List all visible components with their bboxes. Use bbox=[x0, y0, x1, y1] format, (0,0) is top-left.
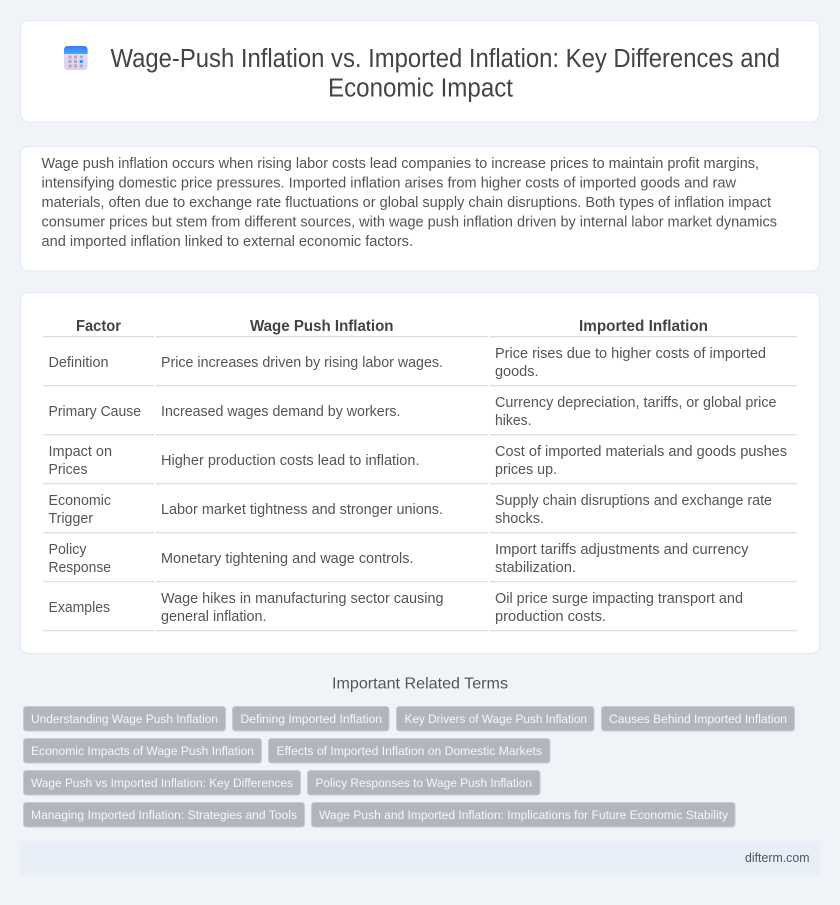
tag: Economic Impacts of Wage Push Inflation bbox=[31, 744, 254, 758]
table header row: Wage Push Inflation bbox=[250, 318, 394, 335]
text block: summary paragraph: and imported inflation linked to external economic factors. bbox=[42, 234, 413, 250]
table row: Definition: Price increases driven by rising labor wages. bbox=[161, 355, 443, 371]
tag: Wage Push and Imported Inflation: Implications for Future Economic Stability bbox=[319, 808, 729, 822]
icon: calendar bbox=[64, 46, 88, 70]
text block: summary paragraph: consumer prices but stem from different sources, with wage push inflation driven by internal labor market dynamics bbox=[42, 214, 777, 230]
table row: Impact on Prices: Prices bbox=[48, 462, 88, 478]
tag: Key Drivers of Wage Push Inflation bbox=[404, 712, 587, 726]
footer bbox=[20, 841, 820, 875]
table row: Primary Cause: Increased wages demand by workers. bbox=[161, 404, 400, 420]
tag: Defining Imported Inflation bbox=[240, 712, 382, 726]
tag: Effects of Imported Inflation on Domestic Markets bbox=[276, 744, 542, 758]
tag bbox=[24, 802, 304, 827]
tag: Managing Imported Inflation: Strategies and Tools bbox=[31, 808, 297, 822]
table row: Economic Trigger: Trigger bbox=[48, 511, 93, 527]
table row: Impact on Prices bbox=[48, 444, 787, 478]
table row: Examples: general inflation. bbox=[161, 609, 266, 625]
table row: Examples: Wage hikes in manufacturing sector causing bbox=[161, 591, 444, 607]
text block: summary paragraph bbox=[42, 156, 777, 250]
panel: comparison table bbox=[20, 292, 820, 654]
text block: summary paragraph: Wage push inflation occurs when rising labor costs lead companies to increase prices to maintain profit margins, bbox=[42, 156, 759, 172]
table row: Primary Cause: Primary Cause bbox=[48, 404, 141, 420]
footer: difterm.com bbox=[745, 850, 810, 865]
table row: Primary Cause: Currency depreciation, tariffs, or global price bbox=[495, 395, 776, 411]
table row: Policy Response bbox=[48, 542, 749, 576]
table row: Economic Trigger: Labor market tightness and stronger unions. bbox=[161, 502, 443, 518]
table row: Examples: production costs. bbox=[495, 609, 606, 625]
panel: title header bbox=[20, 20, 820, 122]
table row: Definition: Definition bbox=[48, 355, 108, 371]
tag bbox=[232, 706, 389, 731]
table row: Definition bbox=[48, 346, 766, 380]
tag bbox=[396, 706, 594, 731]
text block: summary paragraph: intensifying domestic price pressures. Imported inflation arises from higher costs of imported goods and raw bbox=[42, 176, 737, 192]
tag bbox=[312, 802, 735, 827]
table row: Examples: Oil price surge impacting transport and bbox=[495, 591, 743, 607]
table row: Policy Response: stabilization. bbox=[495, 560, 576, 576]
table header row: Factor bbox=[76, 318, 121, 335]
text block: summary paragraph: materials, often due to exchange rate fluctuations or global supply chain disruptions. Both types of inflation impact bbox=[42, 195, 771, 211]
table header row bbox=[76, 318, 708, 335]
table row: Examples: Examples bbox=[48, 600, 110, 616]
table row: Impact on Prices: Cost of imported materials and goods pushes bbox=[495, 444, 787, 460]
table row: Policy Response: Response bbox=[48, 560, 111, 576]
tag: Wage Push vs Imported Inflation: Key Differences bbox=[31, 776, 293, 790]
tag bbox=[602, 706, 794, 731]
table row: Definition: goods. bbox=[495, 364, 538, 380]
tag: Understanding Wage Push Inflation bbox=[31, 712, 218, 726]
tag bbox=[24, 706, 226, 731]
table row: Policy Response: Policy bbox=[48, 542, 87, 558]
tag bbox=[24, 738, 262, 763]
table row: Policy Response: Import tariffs adjustments and currency bbox=[495, 542, 749, 558]
panel: introduction bbox=[20, 146, 820, 271]
table row: Primary Cause: hikes. bbox=[495, 413, 532, 429]
table row: Economic Trigger bbox=[48, 493, 772, 527]
table row: Impact on Prices: Higher production costs lead to inflation. bbox=[161, 453, 420, 469]
tag bbox=[268, 738, 550, 763]
table row: Definition: Price rises due to higher costs of imported bbox=[495, 346, 766, 362]
table row: Policy Response: Monetary tightening and wage controls. bbox=[161, 551, 414, 567]
tag: Policy Responses to Wage Push Inflation bbox=[316, 776, 532, 790]
table row: Examples bbox=[48, 591, 743, 625]
tag: Causes Behind Imported Inflation bbox=[609, 712, 787, 726]
title: Wage-Push Inflation vs. Imported Inflation: Key Differences and bbox=[110, 45, 780, 73]
tag bbox=[24, 770, 300, 795]
table row: Primary Cause bbox=[48, 395, 776, 429]
title bbox=[110, 45, 780, 102]
table header row: Imported Inflation bbox=[579, 318, 708, 335]
tag bbox=[308, 770, 540, 795]
table row: Economic Trigger: Supply chain disruptions and exchange rate bbox=[495, 493, 772, 509]
table row: Economic Trigger: Economic bbox=[48, 493, 111, 509]
heading: related terms: Important Related Terms bbox=[332, 676, 508, 692]
table row: Impact on Prices: prices up. bbox=[495, 462, 557, 478]
table row: Impact on Prices: Impact on bbox=[48, 444, 112, 460]
table row: Economic Trigger: shocks. bbox=[495, 511, 544, 527]
panel: related term tags bbox=[24, 706, 794, 827]
title: Economic Impact bbox=[328, 74, 513, 102]
